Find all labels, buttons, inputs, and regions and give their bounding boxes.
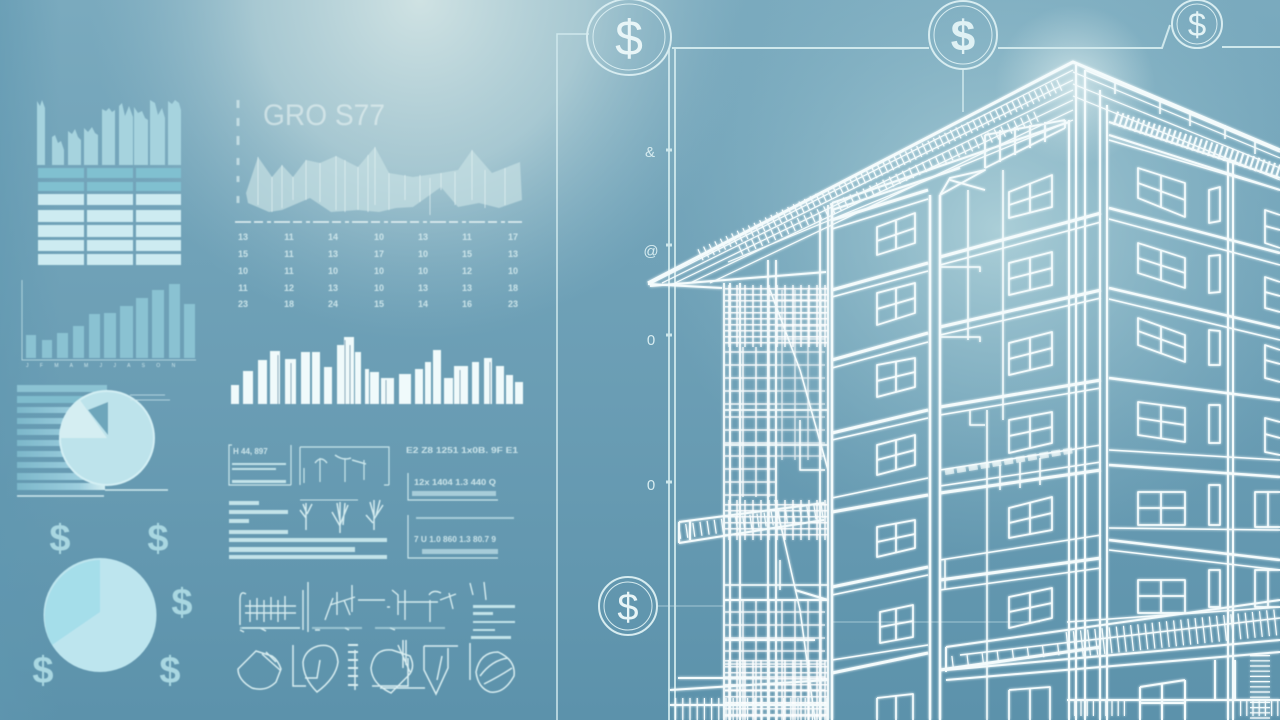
table: small value grid: 15 [374, 299, 384, 309]
table: small value grid: 15 [238, 249, 248, 259]
table: small value grid [238, 232, 518, 309]
table: small value grid: 10 [238, 266, 248, 276]
table: small value grid: 12 [284, 283, 294, 293]
icon: dollar coin middle [929, 1, 997, 69]
axis markers: 0 [647, 477, 655, 494]
table: small value grid: 16 [462, 299, 472, 309]
schematic sketches [240, 582, 486, 632]
roof [648, 62, 1280, 288]
dormer strip [940, 120, 1065, 195]
table: small value grid: 12 [462, 266, 472, 276]
table: small value grid: 11 [462, 232, 472, 242]
table: small value grid: 10 [508, 266, 518, 276]
report labels: E2 Z8 1251 1x0B. 9F E1 [406, 446, 519, 455]
icon: dollar coin large: $ [615, 10, 643, 66]
table: small value grid: 10 [374, 283, 384, 293]
table: small value grid: 11 [284, 249, 294, 259]
axis markers [643, 144, 659, 494]
windows: slim openings [1209, 187, 1220, 607]
heading: chart label: GRO S77 [263, 99, 385, 132]
icons: dollar signs [32, 518, 193, 692]
icons: dollar signs: $ [171, 582, 193, 624]
report stripes [229, 463, 514, 559]
table: small value grid: 23 [238, 299, 248, 309]
building wireframe [648, 62, 1280, 720]
data table [38, 168, 181, 265]
schematic stripes [240, 605, 515, 639]
chart: striped panel with pie [17, 385, 170, 496]
icon: dollar coin right: $ [1188, 6, 1206, 43]
windows: right wing [1138, 168, 1185, 613]
chart: growth bars: J F M A M J J A S O N [26, 363, 180, 369]
report labels [233, 446, 519, 544]
table: small value grid: 13 [328, 283, 338, 293]
icon: dollar coin large [587, 0, 671, 75]
chart: large pie [44, 558, 156, 672]
report labels: 12x 1404 1.3 440 Q [414, 478, 496, 487]
icon: dollar coin lower: $ [617, 587, 639, 629]
table: small value grid: 11 [238, 283, 248, 293]
panel: technical sketches [238, 582, 515, 694]
table: small value grid: 10 [328, 266, 338, 276]
table: small value grid: 10 [418, 266, 428, 276]
table: small value grid: 13 [508, 249, 518, 259]
lower right balcony [946, 600, 1280, 720]
table: small value grid: 18 [508, 283, 518, 293]
chart: growth bars [22, 280, 196, 369]
right wing structure [1109, 140, 1280, 720]
table: small value grid: 11 [284, 232, 294, 242]
table: small value grid: 14 [328, 232, 338, 242]
panel: analytics dashboard [17, 99, 523, 694]
axis markers: 0 [647, 332, 655, 349]
table: small value grid: 13 [418, 283, 428, 293]
chart: spiky bars with table [37, 100, 181, 265]
table: small value grid: 13 [328, 249, 338, 259]
table: small value grid: 10 [418, 249, 428, 259]
icon: dollar coin middle: $ [951, 12, 975, 61]
table: small value grid: 17 [508, 232, 518, 242]
icons: dollar signs: $ [49, 518, 71, 560]
spiky bars [37, 100, 181, 165]
icon: dollar coin lower [599, 577, 657, 635]
chart: wave area [235, 100, 522, 222]
icons: dollar signs: $ [147, 518, 169, 560]
table: small value grid: 13 [238, 232, 248, 242]
table: small value grid: 10 [374, 232, 384, 242]
table: small value grid: 17 [374, 249, 384, 259]
table: small value grid: 18 [284, 299, 294, 309]
center wing structure [832, 170, 1101, 720]
panel: connector lines and money nodes [557, 0, 1280, 720]
table: small value grid: 23 [508, 299, 518, 309]
icons: dollar signs: $ [32, 650, 54, 692]
heart and shield outlines [238, 640, 514, 694]
mini chart boxes [229, 445, 498, 558]
table: small value grid: 13 [418, 232, 428, 242]
report labels: 7 U 1.0 860 1.3 80.7 9 [414, 535, 497, 544]
icons: dollar signs: $ [159, 650, 181, 692]
windows: center-right column [1009, 175, 1052, 720]
axis markers: @ [643, 243, 659, 260]
table: small value grid: 13 [462, 283, 472, 293]
chart: white column bars [231, 337, 523, 404]
windows: far right edge [1255, 210, 1280, 607]
axis markers: & [645, 144, 655, 161]
plant sketches [300, 500, 383, 533]
table: small value grid: 15 [462, 249, 472, 259]
table: small value grid: 24 [328, 299, 338, 309]
table: small value grid: 10 [374, 266, 384, 276]
left tower [670, 205, 830, 720]
report labels: H 44, 897 [233, 447, 268, 456]
windows: center-left column [877, 213, 915, 720]
panel: mini reports [229, 445, 519, 559]
table: small value grid: 14 [418, 299, 428, 309]
table: small value grid: 11 [284, 266, 294, 276]
connector lines [557, 25, 1280, 720]
icon: dollar coin right [1172, 0, 1222, 48]
corner columns [1069, 65, 1107, 720]
